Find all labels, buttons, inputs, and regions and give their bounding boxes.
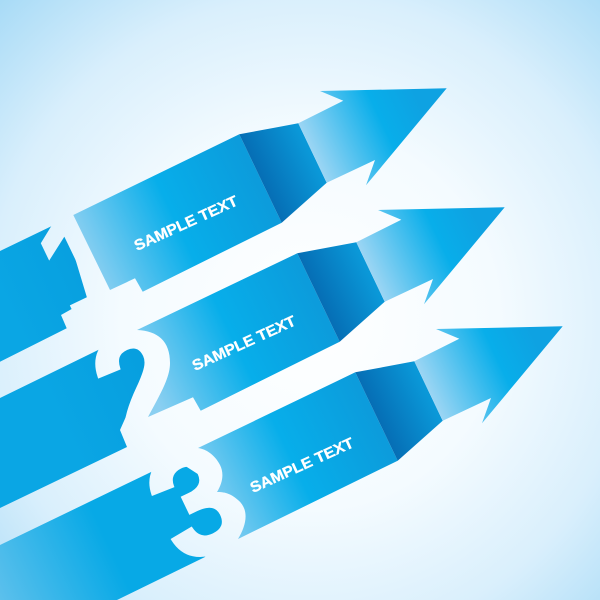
arrow 1 xyxy=(73,88,447,292)
arrow 3 xyxy=(198,326,563,539)
label 2: SAMPLE TEXT xyxy=(190,313,299,375)
number 2: 2 xyxy=(67,287,218,479)
label 3: SAMPLE TEXT xyxy=(248,435,357,497)
arrow 3 tail xyxy=(0,460,228,600)
number 1: 1 xyxy=(13,169,157,351)
arrow 1 fold xyxy=(239,123,327,223)
arrow 3 fold xyxy=(355,361,443,461)
label 1: SAMPLE TEXT xyxy=(132,193,241,255)
arrow 3 head xyxy=(414,326,563,423)
arrow 2 tail xyxy=(0,332,148,508)
arrow 2 head xyxy=(356,207,505,304)
number 3: 3 xyxy=(122,405,273,597)
arrow 1 front face xyxy=(73,134,282,292)
arrow 2 front face xyxy=(137,253,340,417)
arrow 1 head xyxy=(298,88,447,185)
arrow 3 front face xyxy=(198,372,398,539)
arrow 2 xyxy=(137,207,505,417)
arrow 1 tail xyxy=(0,224,88,362)
arrow 2 fold xyxy=(297,242,385,342)
